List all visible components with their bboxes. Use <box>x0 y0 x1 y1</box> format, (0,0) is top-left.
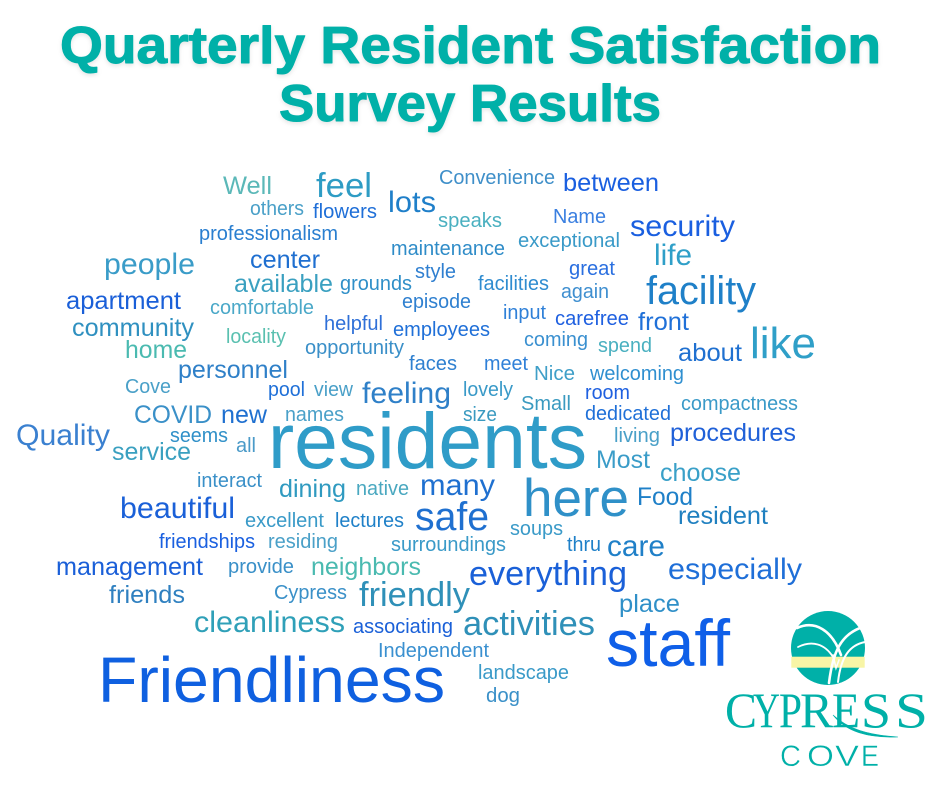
word cloud: welcoming <box>589 363 684 385</box>
word cloud: care <box>607 530 665 563</box>
word cloud: Most <box>596 446 650 474</box>
word cloud: again <box>561 281 609 303</box>
word cloud: staff <box>606 607 731 680</box>
word cloud: lots <box>388 186 436 219</box>
wordmark: COVE: C <box>780 740 801 773</box>
word cloud: safe <box>415 495 489 539</box>
word cloud: room <box>585 382 630 404</box>
word cloud: choose <box>660 459 741 487</box>
wordmark: CYPRESS: E <box>832 682 860 738</box>
wordmark: CYPRESS: P <box>779 682 802 738</box>
word cloud: friendly <box>359 576 471 614</box>
word cloud: pool <box>268 379 305 401</box>
word cloud: community <box>72 314 194 342</box>
word cloud: faces <box>409 353 457 375</box>
word cloud: Nice <box>534 363 575 385</box>
word cloud: meet <box>484 353 528 375</box>
word cloud: residing <box>268 531 338 553</box>
word cloud: great <box>569 258 615 280</box>
word cloud: names <box>285 404 344 426</box>
wordmark: COVE: E <box>861 740 879 773</box>
word cloud: grounds <box>340 273 412 295</box>
word cloud: apartment <box>66 287 181 315</box>
word cloud: place <box>619 590 680 618</box>
word cloud: living <box>614 425 660 447</box>
word cloud: soups <box>510 518 563 540</box>
word cloud: Convenience <box>439 167 555 189</box>
word cloud: Name <box>553 206 606 228</box>
word cloud: opportunity <box>305 337 404 359</box>
word cloud: Friendliness <box>98 644 445 716</box>
word cloud: thru <box>567 534 601 556</box>
word cloud: like <box>750 319 816 368</box>
title: Quarterly Resident Satisfaction <box>60 17 881 75</box>
word cloud: Food <box>637 483 693 511</box>
word cloud: new <box>221 401 268 429</box>
word cloud: friendships <box>159 531 255 553</box>
title: Survey Results <box>279 75 661 133</box>
word cloud: dog <box>486 685 520 707</box>
word cloud: service <box>112 438 191 466</box>
word cloud: center <box>250 246 320 274</box>
word cloud: helpful <box>324 313 383 335</box>
word cloud: coming <box>524 329 588 351</box>
word cloud: Well <box>223 172 272 200</box>
icon: cypress tree emblem <box>791 611 865 685</box>
word cloud: COVID <box>134 401 212 429</box>
word cloud: life <box>654 239 692 272</box>
swoosh under wordmark <box>833 715 898 737</box>
word cloud: maintenance <box>391 238 505 260</box>
word cloud: everything <box>469 555 627 593</box>
word cloud: activities <box>463 605 595 643</box>
word cloud: Cypress <box>274 582 347 604</box>
word cloud: here <box>523 469 629 528</box>
word cloud: personnel <box>178 356 288 384</box>
word cloud: compactness <box>681 393 798 415</box>
wordmark: CYPRESS: S <box>861 682 891 738</box>
word cloud: front <box>638 308 689 336</box>
word cloud: episode <box>402 291 471 313</box>
word cloud: others <box>250 198 304 220</box>
word cloud: many <box>420 469 495 502</box>
word cloud: dedicated <box>585 403 671 425</box>
word cloud: lovely <box>463 379 513 401</box>
word cloud: security <box>630 210 735 243</box>
word cloud: size <box>463 404 497 426</box>
word cloud: residents <box>268 397 587 485</box>
word cloud: home <box>125 336 187 364</box>
word cloud: landscape <box>478 662 569 684</box>
word cloud: dining <box>279 475 346 503</box>
word cloud: Independent <box>378 640 489 662</box>
word cloud: facility <box>646 269 756 313</box>
word cloud: carefree <box>555 308 629 330</box>
word cloud: exceptional <box>518 230 620 252</box>
word cloud: provide <box>228 556 294 578</box>
word cloud: excellent <box>245 510 324 532</box>
wordmark: CYPRESS: Y <box>753 682 780 738</box>
word cloud <box>16 167 816 716</box>
word cloud: between <box>563 169 659 197</box>
word cloud: comfortable <box>210 297 314 319</box>
word cloud: seems <box>170 425 228 447</box>
word cloud: procedures <box>670 419 796 447</box>
word cloud: neighbors <box>311 553 421 581</box>
word cloud: management <box>56 553 203 581</box>
word cloud: feel <box>316 167 372 205</box>
word cloud: view <box>314 379 354 401</box>
wordmark: CYPRESS: R <box>800 682 834 738</box>
word cloud: resident <box>678 502 768 530</box>
wordmark: COVE: V <box>835 740 859 773</box>
word cloud: input <box>503 302 546 324</box>
word cloud: speaks <box>438 210 502 232</box>
word cloud: interact <box>197 470 262 492</box>
wordmark: CYPRESS: C <box>725 682 757 738</box>
word cloud: flowers <box>313 201 377 223</box>
word cloud: about <box>678 339 742 367</box>
word cloud: available <box>234 270 333 298</box>
word cloud: all <box>236 435 256 457</box>
word cloud: employees <box>393 319 490 341</box>
word cloud: beautiful <box>120 492 235 525</box>
word cloud: Quality <box>16 419 110 452</box>
word cloud: locality <box>226 326 286 348</box>
logo: Cypress Cove <box>725 611 928 773</box>
word cloud: cleanliness <box>194 606 345 639</box>
word cloud: Cove <box>125 376 171 398</box>
word cloud: feeling <box>362 377 451 410</box>
word cloud: Small <box>521 393 571 415</box>
word cloud: surroundings <box>391 534 506 556</box>
wordmark: COVE: O <box>807 740 834 773</box>
word cloud: associating <box>353 616 453 638</box>
word cloud: lectures <box>335 510 404 532</box>
word cloud: native <box>356 478 409 500</box>
word cloud: spend <box>598 335 652 357</box>
wordmark: CYPRESS: S <box>895 682 928 738</box>
word cloud: style <box>415 261 456 283</box>
wordmark: COVE <box>780 740 879 773</box>
word cloud: people <box>104 248 195 281</box>
title <box>60 17 881 133</box>
word cloud: facilities <box>478 273 549 295</box>
word cloud: professionalism <box>199 223 338 245</box>
wordmark: CYPRESS <box>725 682 928 738</box>
word cloud: friends <box>109 581 185 609</box>
word cloud: especially <box>668 553 802 586</box>
